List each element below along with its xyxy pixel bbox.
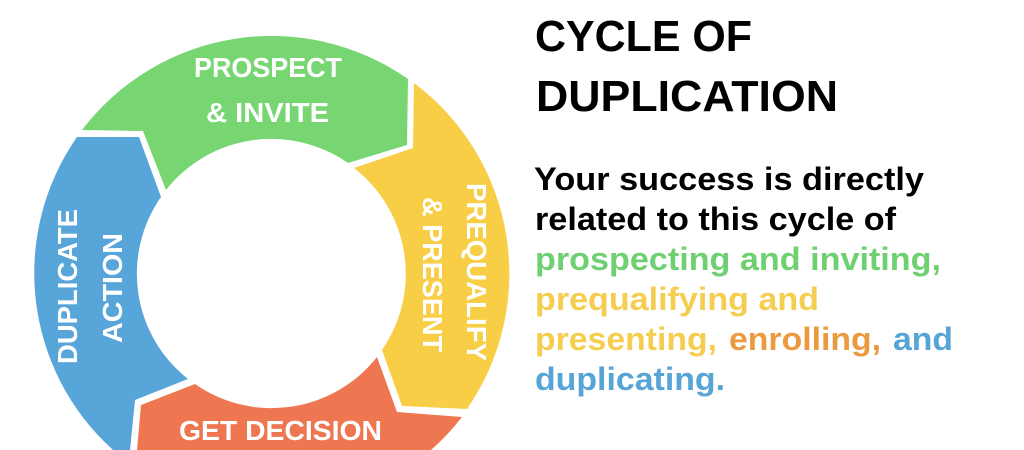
body text [534,161,953,397]
body text: related to this cycle of [535,201,896,237]
panel: prospect and invite segment: & INVITE [206,97,329,128]
panel: prequalify and present segment: & PRESENT [417,197,448,352]
body text: and [893,321,953,357]
body text: Your success is directly [534,161,924,197]
body text: duplicating. [535,361,725,397]
body text: prospecting and inviting, [535,241,941,277]
panel: duplicate action segment: ACTION [97,233,128,343]
panel: prospect and invite segment: PROSPECT [194,52,342,83]
panel: get decision segment [137,357,462,450]
cycle diagram [34,36,509,450]
body text: prequalifying and [535,281,819,317]
title: DUPLICATION [536,72,838,121]
body text: presenting, [535,321,717,357]
panel: duplicate action segment [34,137,188,450]
panel: duplicate action segment: DUPLICATE [52,209,83,364]
panel: get decision segment: GET DECISION [179,415,382,446]
panel: prospect and invite segment [82,36,408,190]
title [535,12,838,121]
body text: enrolling, [729,321,881,357]
panel: prequalify and present segment [354,83,509,409]
panel: prequalify and present segment: PREQUALIFY [461,183,492,361]
title: CYCLE OF [535,12,752,61]
